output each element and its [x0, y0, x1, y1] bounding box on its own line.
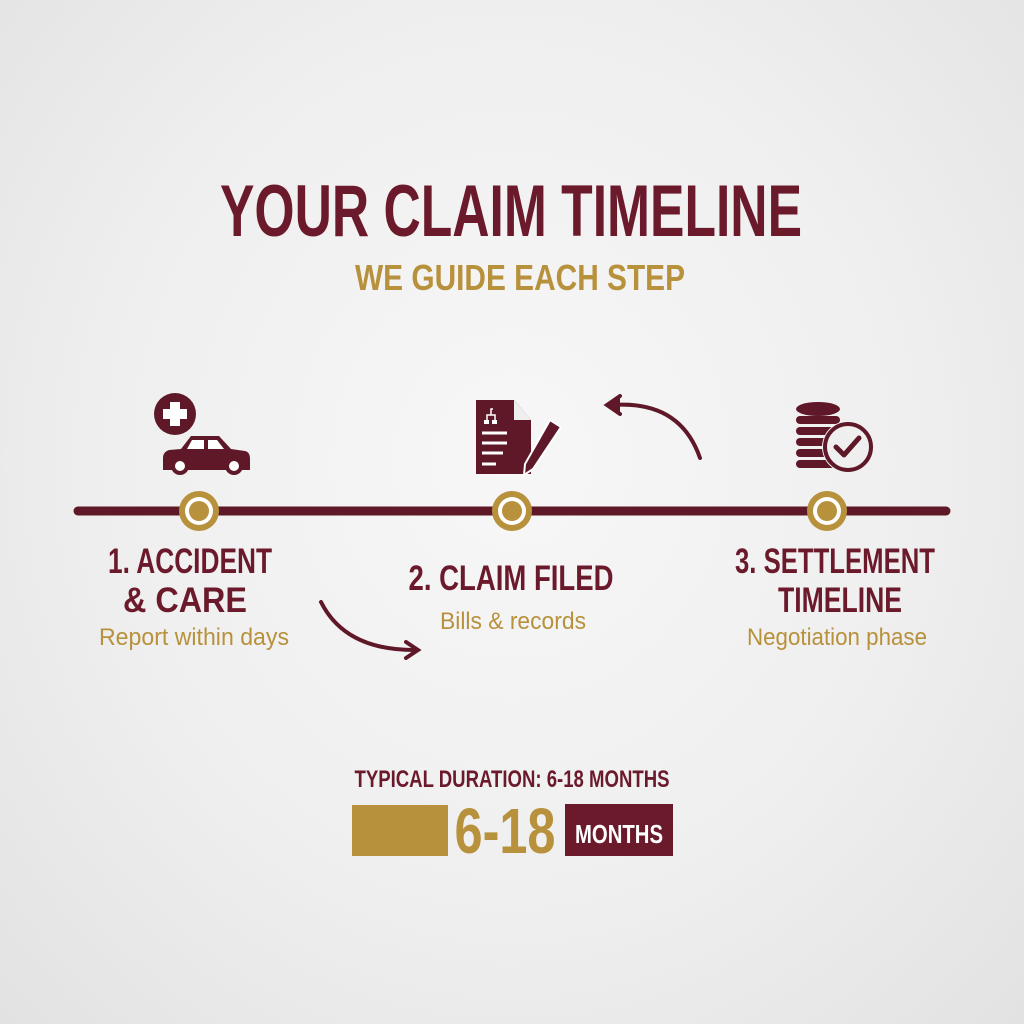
icon: medical car: [154, 393, 250, 475]
step 3 text: Negotiation phase: [747, 624, 927, 651]
duration badge: [352, 795, 673, 867]
step 1 text: & CARE: [123, 581, 247, 620]
arrow: lower curved: [321, 602, 418, 658]
step 1 text: [99, 542, 289, 651]
duration label: TYPICAL DURATION: 6-18 MONTHS: [354, 766, 670, 793]
duration badge: 6-18: [454, 795, 556, 867]
step 2 text: Bills & records: [440, 608, 586, 635]
subtitle: WE GUIDE EACH STEP: [355, 257, 685, 298]
icon: document with pen: [476, 400, 561, 475]
step 1 text: Report within days: [99, 624, 289, 651]
marker 3: [807, 491, 847, 531]
title: YOUR CLAIM TIMELINE: [220, 171, 802, 252]
marker 2: [492, 491, 532, 531]
step 1 text: 1. ACCIDENT: [108, 542, 272, 581]
step 2 text: [408, 559, 614, 635]
step 3 text: [735, 542, 935, 651]
step 2 text: 2. CLAIM FILED: [408, 559, 614, 598]
arrow: upper curved: [607, 396, 700, 458]
timeline line: [78, 491, 946, 531]
icon: coins with check: [796, 402, 874, 473]
step 3 text: TIMELINE: [778, 581, 902, 620]
duration badge: MONTHS: [575, 819, 663, 849]
step 3 text: 3. SETTLEMENT: [735, 542, 935, 581]
marker 1: [179, 491, 219, 531]
